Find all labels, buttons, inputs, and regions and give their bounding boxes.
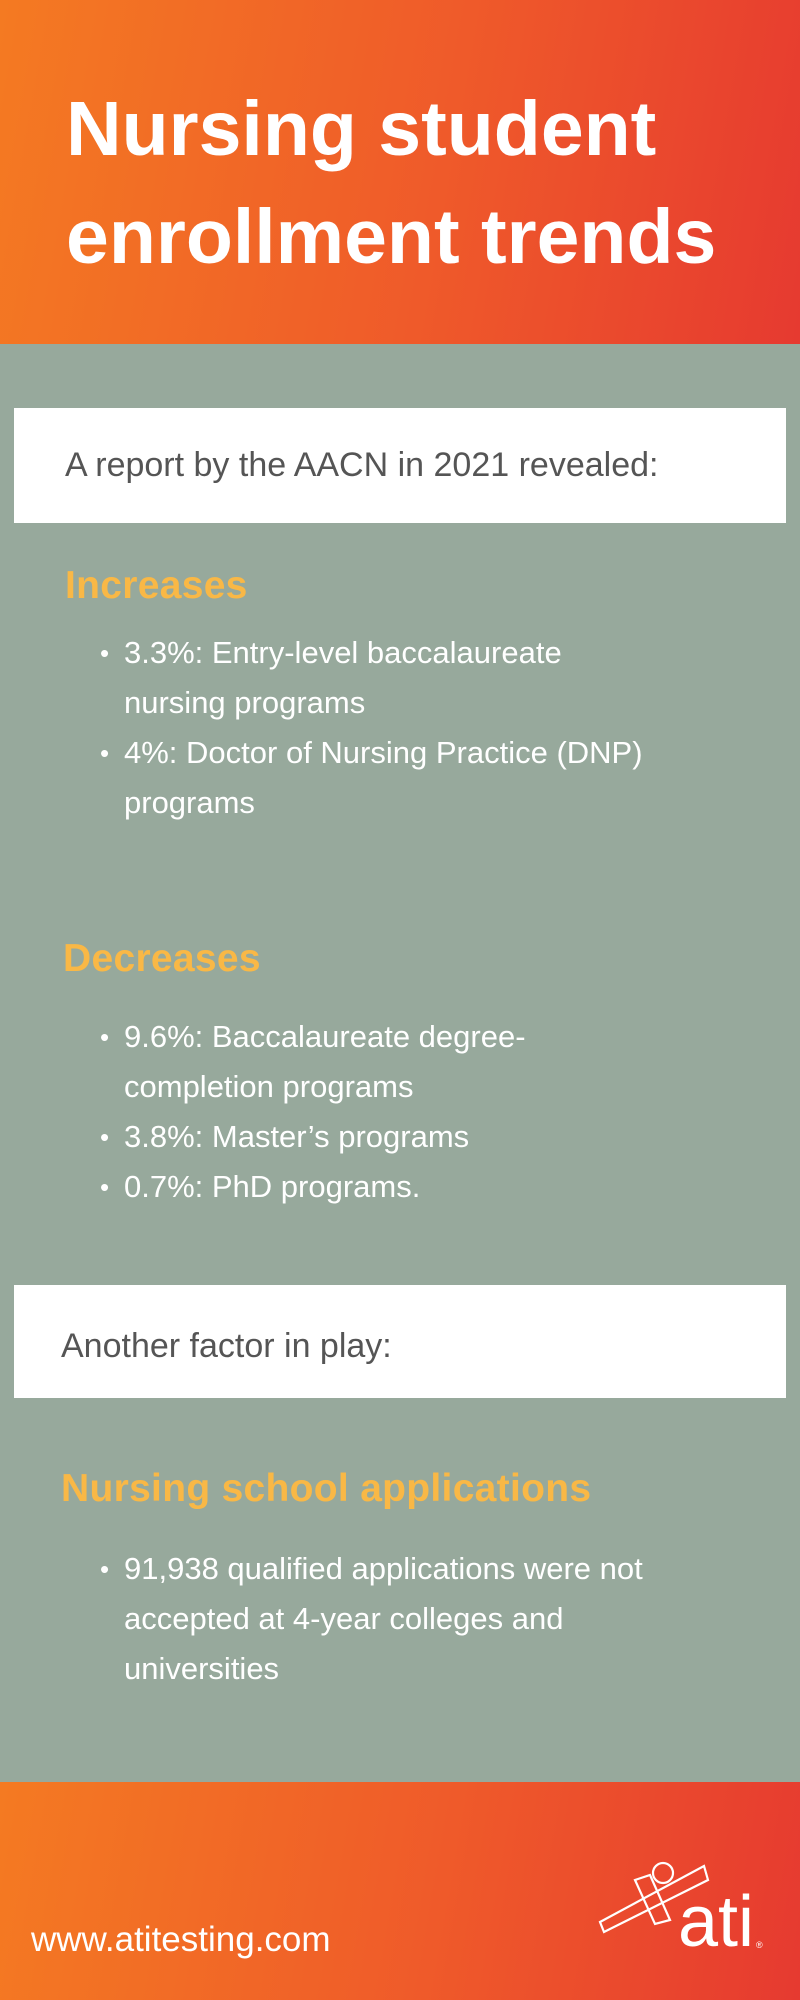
logo: ati xyxy=(598,1862,763,1962)
footer xyxy=(0,1782,800,2000)
title: enrollment trends xyxy=(66,194,716,280)
list: increases: 4%: Doctor of Nursing Practice (DNP) programs xyxy=(124,735,643,820)
logo: ati: ® xyxy=(756,1940,763,1950)
list: increases: 3.3%: Entry-level baccalaureate nursing programs xyxy=(124,635,562,720)
title xyxy=(66,86,716,280)
logo: ati: ati xyxy=(678,1882,754,1962)
list: applications: 91,938 qualified applications were not accepted at 4-year colleges and universities xyxy=(124,1551,643,1686)
heading: applications: Nursing school applications xyxy=(61,1467,591,1510)
heading: decreases: Decreases xyxy=(63,937,261,980)
url: www.atitesting.com xyxy=(31,1920,331,1959)
intro box: A report by the AACN in 2021 revealed: xyxy=(65,446,658,484)
factor box xyxy=(14,1285,786,1398)
header xyxy=(0,0,800,344)
list: decreases: 0.7%: PhD programs. xyxy=(124,1169,420,1204)
list: decreases xyxy=(101,1019,526,1204)
list: decreases: 3.8%: Master’s programs xyxy=(124,1119,469,1154)
title: Nursing student xyxy=(66,86,656,172)
list: increases xyxy=(101,635,643,820)
list: decreases: 9.6%: Baccalaureate degree-completion programs xyxy=(124,1019,526,1104)
factor box: Another factor in play: xyxy=(61,1327,392,1365)
intro box xyxy=(14,408,786,523)
heading: increases: Increases xyxy=(65,564,248,607)
